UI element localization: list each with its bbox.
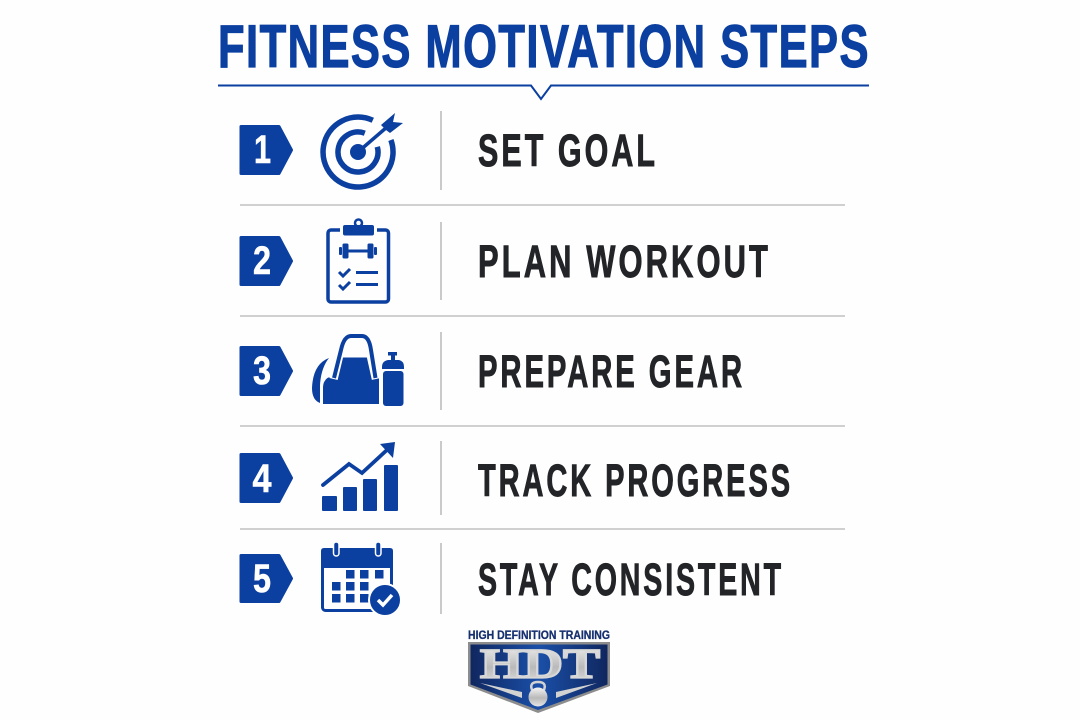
step 2: plan workout	[241, 220, 771, 302]
step 3: prepare gear	[241, 332, 745, 410]
badge 2	[241, 238, 292, 284]
title underline with pointer	[218, 86, 869, 99]
label: set goal: SET GOAL	[478, 125, 658, 176]
logo kettlebell	[528, 682, 548, 706]
icon: calendar with check	[321, 542, 401, 616]
icon: gym bag and bottle	[312, 336, 404, 406]
icon: target with arrow	[323, 113, 403, 187]
step 1: set goal	[241, 111, 658, 190]
badge 5: 5	[253, 557, 271, 601]
logo tagline: HIGH DEFINITION TRAINING	[468, 628, 610, 642]
logo letters HDT: HDT	[480, 642, 600, 688]
badge 5	[241, 556, 292, 602]
badge 1	[241, 126, 292, 174]
step 5: stay consistent	[241, 542, 784, 616]
label: prepare gear: PREPARE GEAR	[478, 346, 745, 397]
label: stay consistent: STAY CONSISTENT	[478, 554, 784, 605]
badge 1: 1	[254, 128, 271, 172]
icon: rising bar chart with arrow	[322, 442, 398, 511]
label: plan workout: PLAN WORKOUT	[478, 236, 771, 287]
icon: clipboard with dumbbell	[328, 220, 388, 302]
logo shield	[468, 642, 610, 713]
badge 4	[241, 454, 292, 502]
badge 4: 4	[252, 457, 272, 501]
logo: high definition training	[468, 628, 610, 713]
badge 3	[241, 348, 292, 394]
step 4: track progress	[241, 441, 793, 515]
badge 3: 3	[253, 349, 271, 393]
logo swooshes	[480, 683, 597, 698]
badge 2: 2	[253, 239, 271, 283]
label: track progress: TRACK PROGRESS	[478, 455, 793, 506]
